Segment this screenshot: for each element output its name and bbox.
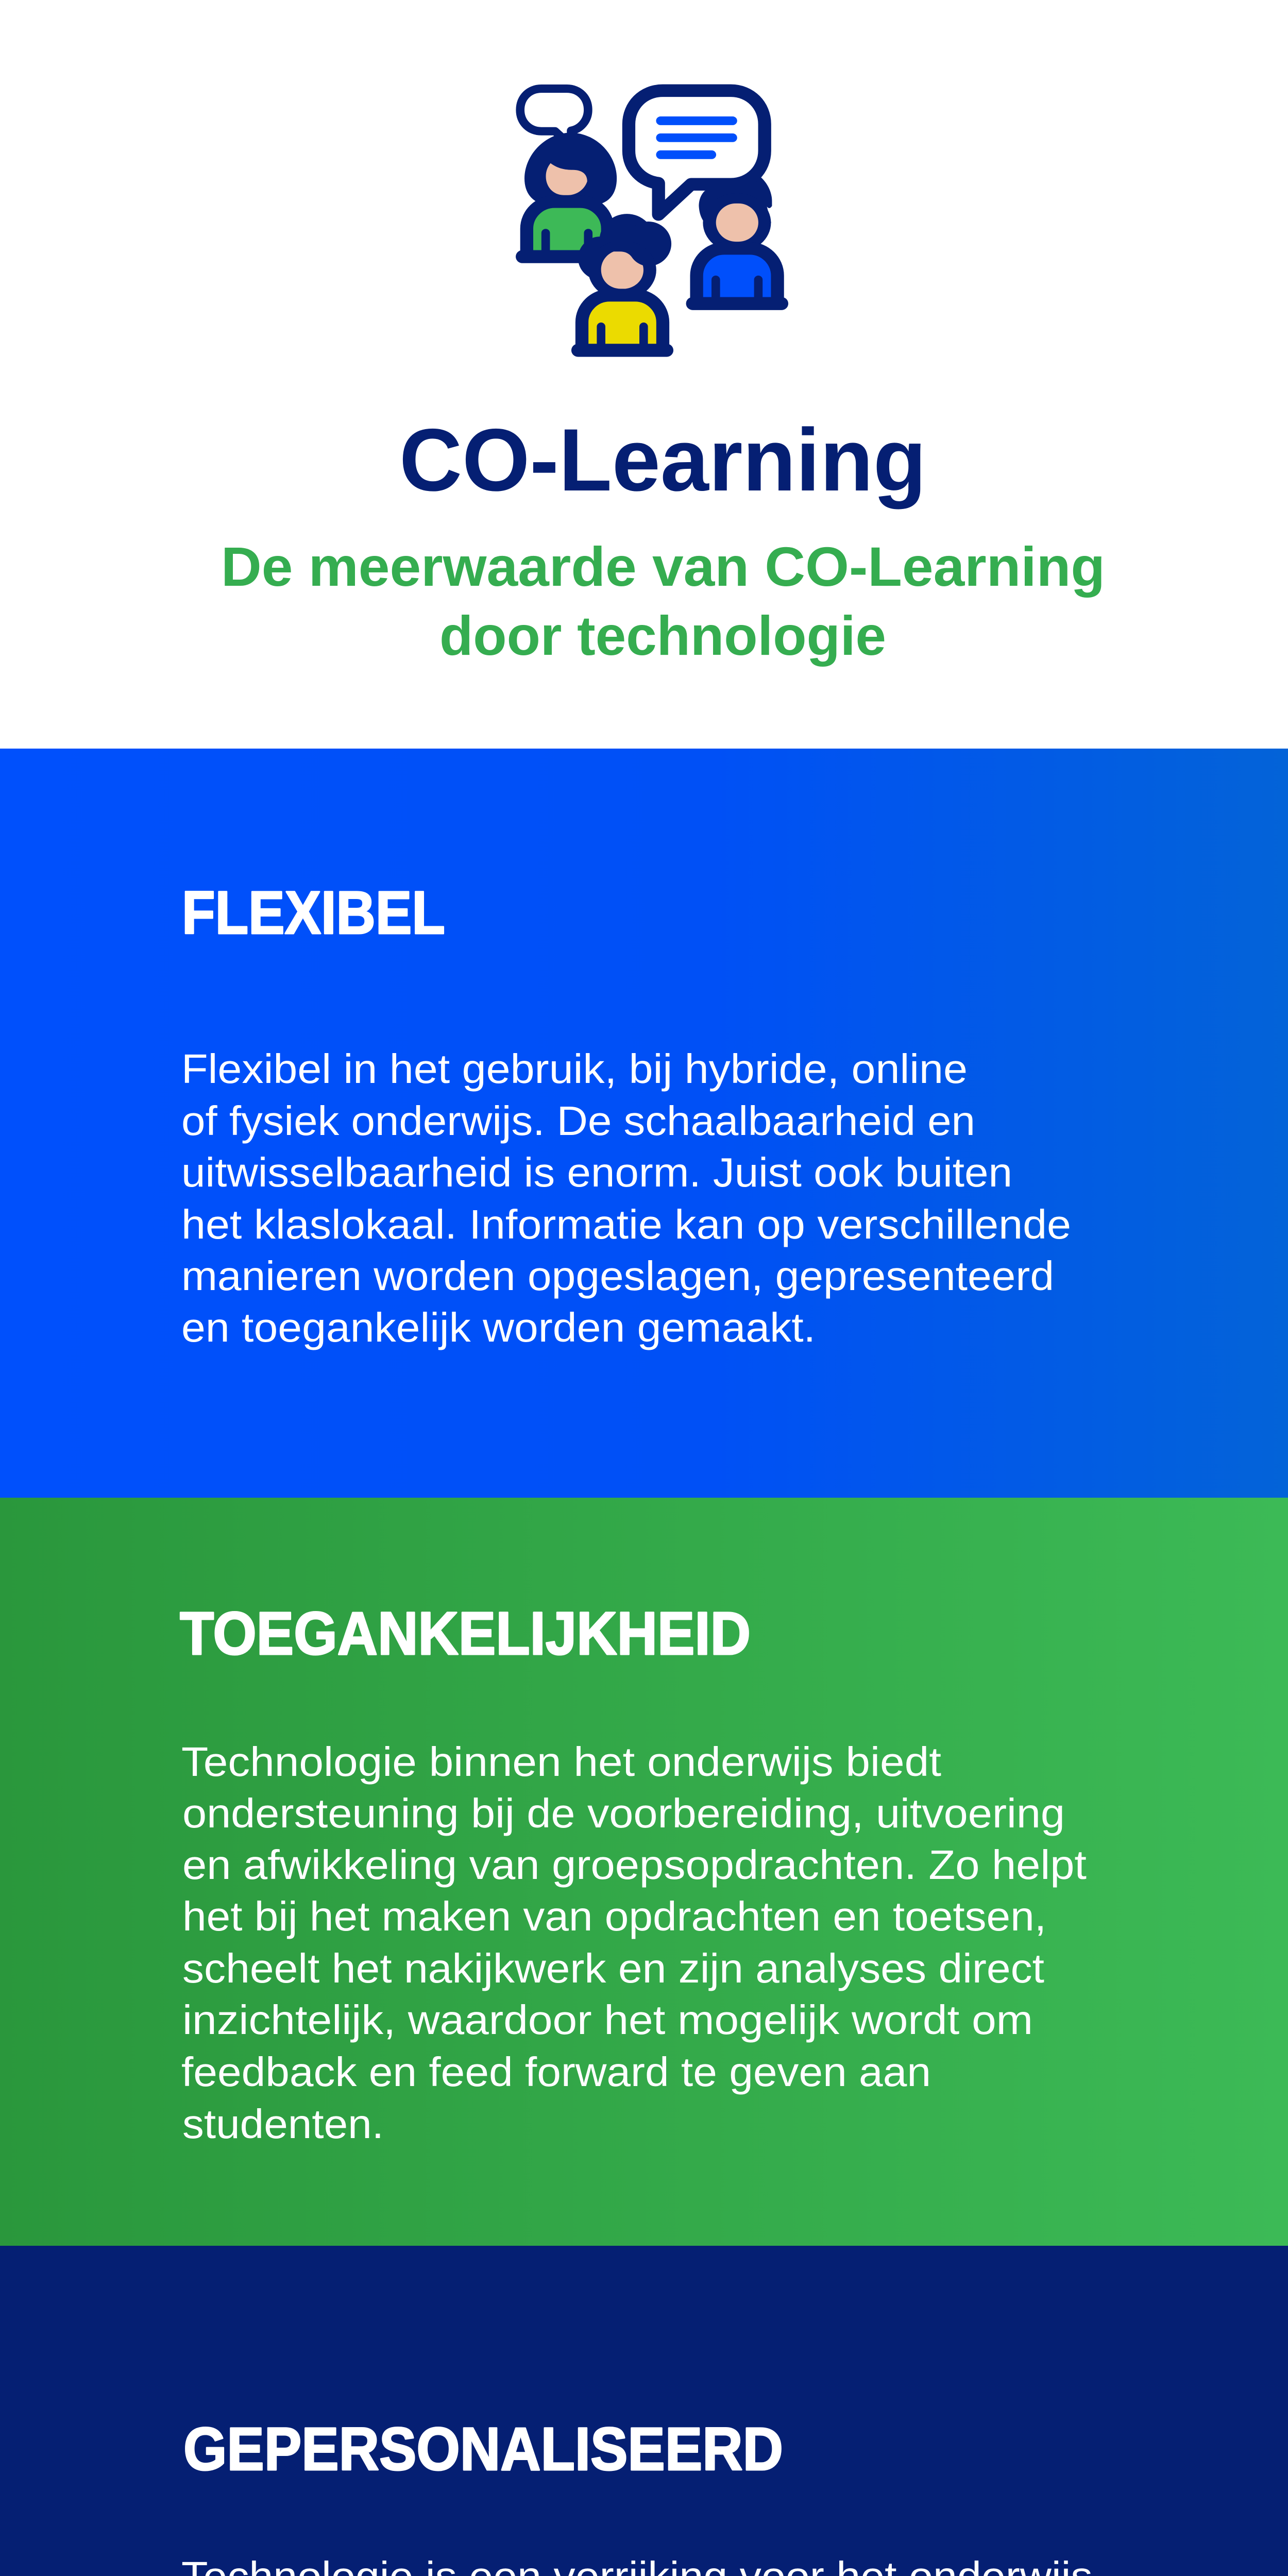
icon: person in green: [522, 132, 617, 257]
subtitle: [221, 535, 1105, 667]
text block: flexibel: uitwisselbaarheid is enorm. Juist ook buiten: [181, 1149, 1012, 1195]
text block: flexibel: manieren worden opgeslagen, gepresenteerd: [181, 1253, 1054, 1299]
text block: toegankelijkheid: studenten.: [182, 2101, 384, 2147]
title: CO-Learning: [399, 411, 926, 510]
panel: gepersonaliseerd: [0, 2246, 1288, 2576]
header panel: [0, 0, 1288, 749]
text block: flexibel: [181, 1046, 1071, 1350]
heading: toegankelijkheid: TOEGANKELIJKHEID: [180, 1600, 751, 1668]
icon: small speech bubble: [520, 89, 588, 146]
text block: toegankelijkheid: scheelt het nakijkwerk en zijn analyses direct: [182, 1945, 1044, 1991]
icon: large speech bubble with text lines: [629, 91, 765, 214]
text block: flexibel: en toegankelijk worden gemaakt.: [181, 1304, 816, 1350]
heading: gepersonaliseerd: GEPERSONALISEERD: [183, 2415, 783, 2483]
text block: toegankelijkheid: ondersteuning bij de voorbereiding, uitvoering: [182, 1790, 1065, 1836]
text block: toegankelijkheid: inzichtelijk, waardoor het mogelijk wordt om: [182, 1997, 1033, 2043]
icon: person in yellow: [578, 214, 671, 350]
text block: flexibel: Flexibel in het gebruik, bij hybride, online: [181, 1046, 968, 1092]
text block: toegankelijkheid: feedback en feed forward te geven aan: [181, 2049, 931, 2095]
panel: flexibel: [0, 749, 1288, 1498]
text block: toegankelijkheid: en afwikkeling van groepsopdrachten. Zo helpt: [182, 1842, 1087, 1888]
icon: person in blue: [693, 177, 782, 303]
text block: toegankelijkheid: [181, 1739, 1087, 2147]
text block: toegankelijkheid: Technologie binnen het onderwijs biedt: [181, 1739, 941, 1785]
panel: toegankelijkheid: [0, 1498, 1288, 2246]
text block: flexibel: het klaslokaal. Informatie kan op verschillende: [181, 1201, 1071, 1247]
icon: group of people talking: [520, 89, 782, 350]
text block: flexibel: of fysiek onderwijs. De schaalbaarheid en: [181, 1098, 975, 1144]
subtitle: door technologie: [439, 604, 886, 667]
subtitle: De meerwaarde van CO-Learning: [221, 535, 1105, 598]
heading: flexibel: FLEXIBEL: [182, 879, 445, 947]
text block: toegankelijkheid: het bij het maken van opdrachten en toetsen,: [182, 1893, 1046, 1939]
